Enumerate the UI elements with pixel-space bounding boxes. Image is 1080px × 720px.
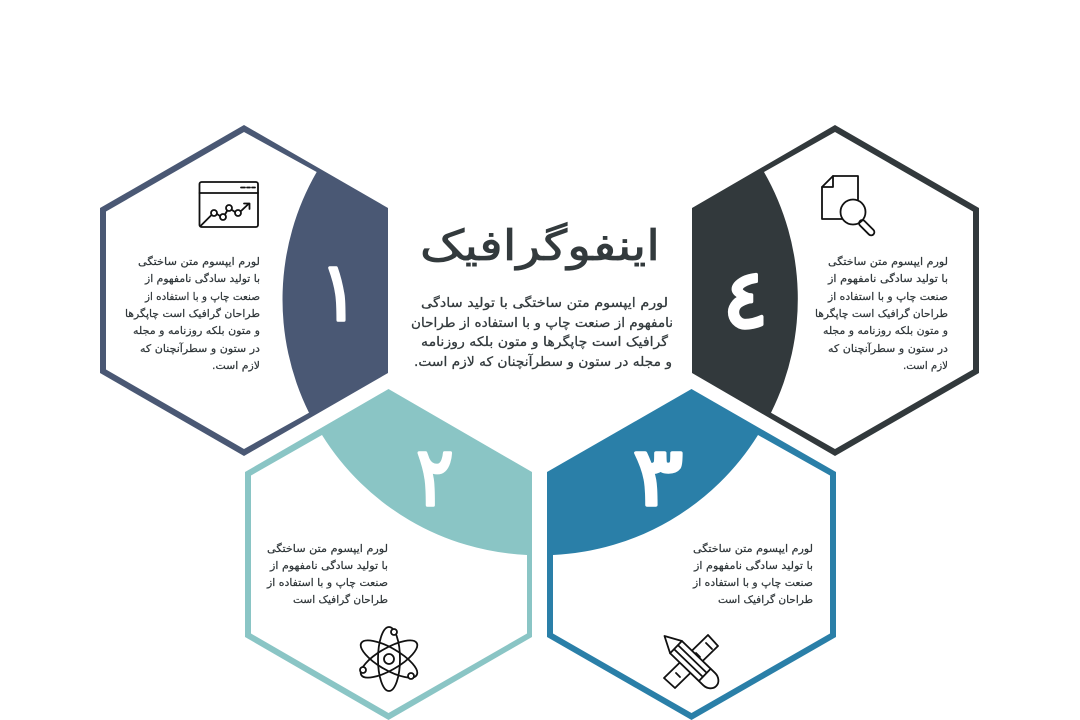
text block 3: صنعت چاپ و با استفاده از xyxy=(692,577,813,589)
center text block: لورم ایپسوم متن ساختگی با تولید سادگی xyxy=(421,295,668,311)
panel: hexagon 3 xyxy=(547,389,836,720)
text block 3 xyxy=(692,542,813,606)
text block 3: با تولید سادگی نامفهوم از xyxy=(693,559,813,572)
text block 2: لورم ایپسوم متن ساختگی xyxy=(267,542,388,555)
text block 1: با تولید سادگی نامفهوم از xyxy=(144,272,260,285)
icon: pencil and ruler xyxy=(659,630,722,692)
icon: document search xyxy=(822,176,876,237)
text block 4: لازم است. xyxy=(903,360,948,372)
text block 1: در ستون و سطرآنچنان که xyxy=(140,342,260,355)
text block 4 xyxy=(815,255,948,372)
text block 2 xyxy=(266,542,388,606)
text block 4: و متون بلکه روزنامه و مجله xyxy=(823,325,948,337)
text block 1: لازم است. xyxy=(212,360,260,372)
text block 1: صنعت چاپ و با استفاده از xyxy=(144,291,260,303)
text block 2: با تولید سادگی نامفهوم از xyxy=(269,559,388,572)
text block 2: طراحان گرافیک است xyxy=(293,593,388,606)
text block 3: طراحان گرافیک است xyxy=(718,593,813,606)
icon: atom xyxy=(356,627,422,691)
text block 3: لورم ایپسوم متن ساختگی xyxy=(693,542,813,555)
center text block: نامفهوم از صنعت چاپ و با استفاده از طراحان xyxy=(411,316,673,331)
panel: hexagon 1 xyxy=(100,125,388,456)
number 4: ٤ xyxy=(722,251,769,347)
number 3: ۳ xyxy=(633,429,683,524)
text block 2: صنعت چاپ و با استفاده از xyxy=(266,577,388,589)
title: اینفوگرافیک xyxy=(420,221,660,270)
center text block: گرافیک است چاپگرها و متون بلکه روزنامه xyxy=(421,334,669,350)
panel: hexagon 4 xyxy=(692,125,979,456)
text block 4: با تولید سادگی نامفهوم از xyxy=(827,272,948,285)
text block 4: صنعت چاپ و با استفاده از xyxy=(827,291,948,303)
text block 4: در ستون و سطرآنچنان که xyxy=(828,342,948,355)
text block 1: و متون بلکه روزنامه و مجله xyxy=(133,325,260,337)
icon: browser chart xyxy=(200,182,258,227)
text block 4: لورم ایپسوم متن ساختگی xyxy=(828,255,948,268)
text block 1: طراحان گرافیک است چاپگرها xyxy=(125,307,260,320)
number 2: ۲ xyxy=(416,428,454,524)
text block 4: طراحان گرافیک است چاپگرها xyxy=(815,307,948,320)
center text block: و مجله در ستون و سطرآنچنان که لازم است. xyxy=(414,353,672,370)
center text block xyxy=(411,295,673,370)
panel: hexagon 2 xyxy=(245,389,532,720)
text block 1: لورم ایپسوم متن ساختگی xyxy=(138,255,260,268)
text block 1 xyxy=(125,255,260,372)
number 1: ۱ xyxy=(320,243,358,339)
